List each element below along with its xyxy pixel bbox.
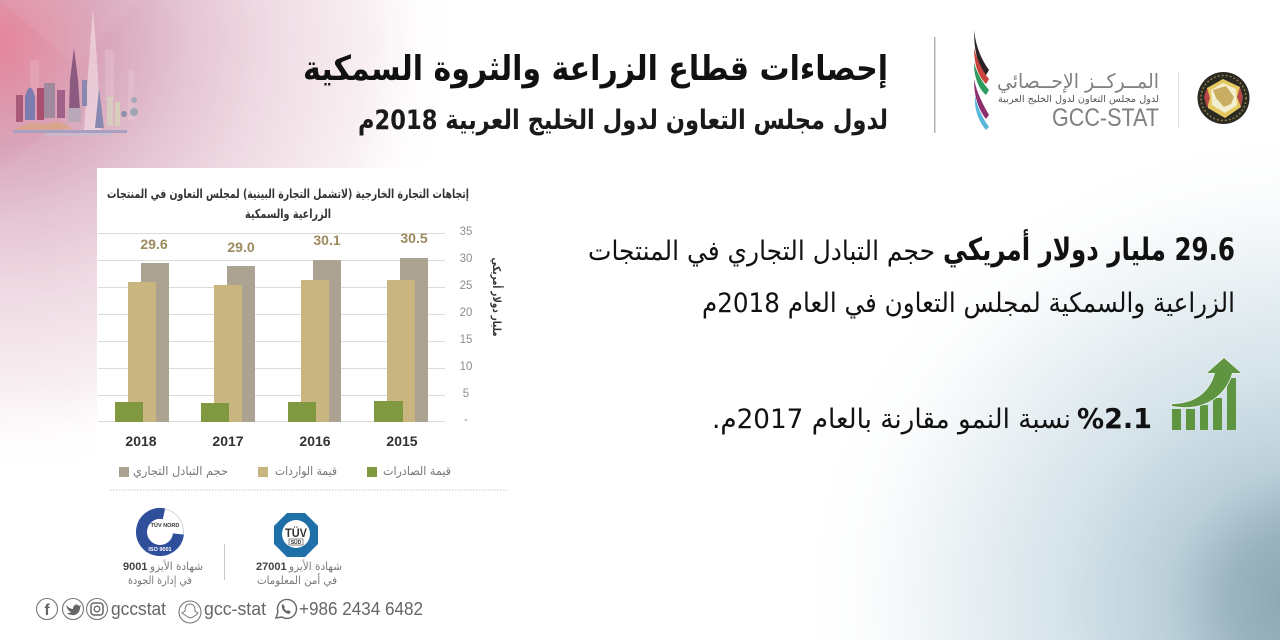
legend: حجم التبادل التجاري xyxy=(133,464,228,479)
panel: chart xyxy=(97,168,507,490)
certification: ISO 27001 xyxy=(256,513,342,587)
icon: facebook: f xyxy=(44,602,50,619)
x axis years: 2016 xyxy=(299,433,331,449)
certification: ISO 27001: 27001 xyxy=(256,561,287,573)
y axis title: مليار دولار أمريكي xyxy=(490,258,504,336)
y axis numbers: 10 xyxy=(460,361,472,373)
text block: trade volume xyxy=(588,229,1235,319)
handle: gccstat: gccstat xyxy=(111,598,166,619)
chart title: الزراعية والسمكية xyxy=(245,206,331,221)
bars: 2017 xyxy=(201,266,255,422)
value labels xyxy=(140,230,428,255)
certification: ISO 9001: 9001 xyxy=(123,561,147,573)
handle: gcc-stat: gcc-stat xyxy=(204,598,266,619)
y axis numbers: 35 xyxy=(460,226,472,238)
icon: facebook xyxy=(36,598,58,620)
dotted rule xyxy=(110,489,507,491)
legend xyxy=(119,464,451,479)
highlight: value: 29.6 مليار دولار أمريكي xyxy=(943,229,1235,268)
y axis numbers xyxy=(460,226,472,426)
certification: ISO 27001: في أمن المعلومات xyxy=(257,573,337,587)
legend: قيمة الواردات xyxy=(275,464,337,479)
phone number: +986 2434 6482 xyxy=(299,598,423,619)
icon: GCC emblem xyxy=(1198,72,1250,124)
divider: logos xyxy=(1178,72,1179,128)
text block: trade volume: حجم التبادل التجاري في المنتجات xyxy=(588,236,935,267)
chart title: إتجاهات التجارة الخارجية (لاتشمل التجارة البينية) لمجلس التعاون في المنتجات xyxy=(107,186,469,201)
divider: certificates xyxy=(224,544,225,580)
y axis numbers: - xyxy=(464,414,468,426)
icon: snapchat xyxy=(179,601,201,623)
icon: TUV SUD: TÜV xyxy=(285,525,307,540)
value labels: 29.0 xyxy=(227,239,255,255)
icon: whatsapp xyxy=(276,599,296,618)
x axis years: 2017 xyxy=(212,433,244,449)
chart title xyxy=(107,186,469,221)
icon: ribbon xyxy=(974,30,989,130)
title xyxy=(303,49,888,136)
icon: TUV Nord: ISO 9001 xyxy=(148,547,172,553)
certification: ISO 9001: شهادة الأيزو xyxy=(149,559,203,573)
value labels: 30.1 xyxy=(313,232,341,248)
x axis years: 2018 xyxy=(125,433,157,449)
y axis numbers: 20 xyxy=(460,307,472,319)
text block: growth: نسبة النمو مقارنة بالعام 2017م. xyxy=(712,404,1071,435)
icon: TUV Nord: TÜV NORD xyxy=(151,522,179,529)
icon: growth arrow xyxy=(1172,358,1241,430)
y axis numbers: 30 xyxy=(460,253,472,265)
logo text: arabic subtitle: لدول مجلس التعاون لدول الخليج العربية xyxy=(998,94,1159,105)
bars: 2016 xyxy=(288,260,341,422)
title line 2: لدول مجلس التعاون لدول الخليج العربية 2018م xyxy=(358,105,888,136)
icon: city skyline xyxy=(13,8,138,136)
bars: 2015 xyxy=(374,258,428,422)
value labels: 30.5 xyxy=(400,230,428,246)
x axis years xyxy=(125,433,418,449)
title line 1: إحصاءات قطاع الزراعة والثروة السمكية xyxy=(303,49,888,89)
logo text: GCC-STAT: GCC-STAT xyxy=(1052,104,1159,132)
value labels: 29.6 xyxy=(140,236,168,252)
icon: TUV SUD xyxy=(274,513,318,557)
y axis numbers: 25 xyxy=(460,280,472,292)
x axis years: 2015 xyxy=(386,433,418,449)
y axis numbers: 5 xyxy=(463,388,469,400)
certification: ISO 9001 xyxy=(123,508,203,587)
y axis numbers: 15 xyxy=(460,334,472,346)
logo text: arabic name: المــركــز الإحــصائي xyxy=(997,69,1159,94)
icon: instagram xyxy=(86,598,108,620)
icon: TUV Nord xyxy=(136,508,184,556)
certification: ISO 27001: شهادة الأيزو xyxy=(288,559,342,573)
highlight: growth rate: %2.1 xyxy=(1077,402,1152,435)
logo: GCC-STAT xyxy=(974,30,1159,132)
certification: ISO 9001: في إدارة الجودة xyxy=(128,574,192,587)
bars: 2018 xyxy=(115,263,169,422)
grid lines xyxy=(98,233,445,422)
divider: header xyxy=(934,37,936,133)
icon: twitter xyxy=(62,598,84,620)
legend: قيمة الصادرات xyxy=(383,464,451,479)
text block: trade volume: الزراعية والسمكية لمجلس التعاون في العام 2018م xyxy=(702,288,1235,319)
social contacts xyxy=(36,598,423,623)
icon: TUV SUD: SÜD xyxy=(291,539,302,546)
